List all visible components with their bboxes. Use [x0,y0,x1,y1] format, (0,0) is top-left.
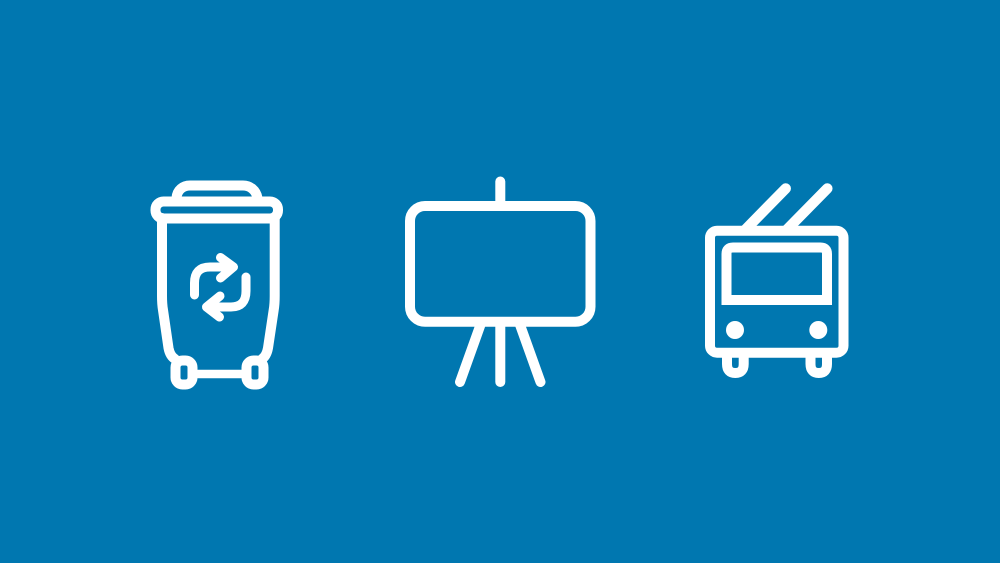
bin body [162,218,275,359]
icon: presentation easel [410,182,590,382]
wheel axle [195,370,243,378]
bin lid handle [176,186,258,198]
bin lid [156,202,278,218]
easel top post [495,182,505,206]
icon: trolleybus [710,188,844,373]
bus body [710,231,844,353]
right foot [810,354,827,373]
left foot [727,354,744,373]
bus window [726,248,827,300]
trolley poles [745,188,827,230]
recycle arrows [194,258,246,317]
left wheel [176,360,192,384]
easel board [410,206,590,322]
icon: recycling bin [156,186,278,384]
left headlight [726,321,744,339]
easel legs [460,322,540,382]
right wheel [246,360,264,384]
right headlight [809,321,827,339]
